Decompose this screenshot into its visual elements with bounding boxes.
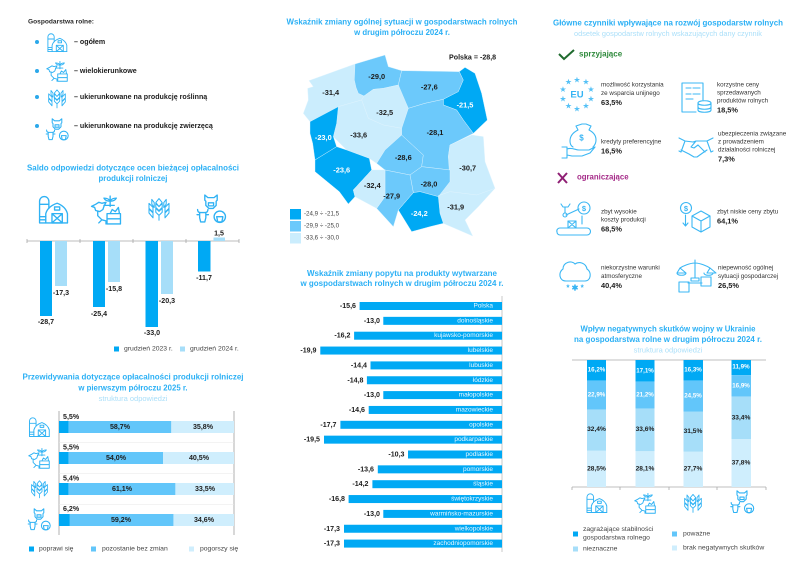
stacked columns: war impact: 27,7% [684, 466, 702, 472]
stacked bars: forecast: 33,5% [195, 485, 216, 493]
heading: map: w drugim półroczu 2024 r. [353, 28, 450, 37]
map values: -24,2 [411, 209, 428, 218]
bar chart: demand by voivodeship: małopolskie [459, 392, 493, 399]
map legend [290, 209, 340, 244]
bar chart: demand by voivodeship: -13,0 [364, 391, 380, 399]
stacked columns: war impact: 11,9% [732, 364, 750, 370]
bar chart: profitability balance: -28,7 [38, 318, 54, 326]
factor: insurance [679, 130, 787, 164]
stacked columns: war impact: 22,9% [588, 392, 606, 398]
bar chart: profitability balance: -11,7 [196, 274, 212, 282]
factor: uncertainty: niepewność ogólnej [718, 264, 773, 272]
bar chart: demand by voivodeship: -13,6 [358, 465, 374, 473]
bar chart: demand by voivodeship: -19,5 [304, 436, 320, 444]
bar chart: demand by voivodeship: -14,2 [352, 480, 369, 488]
stacked columns: war impact: 24,5% [684, 392, 702, 400]
map values: -30,7 [459, 164, 476, 172]
factor: EU support: ★ [565, 78, 572, 86]
bar chart: profitability balance: -20,3 [159, 297, 175, 305]
stacked columns: war impact: 28,1% [636, 466, 654, 472]
factor: uncertainty: 26,5% [718, 281, 739, 290]
stacked bars: forecast: 34,6% [194, 516, 215, 524]
map values: -31,9 [447, 202, 464, 212]
stacked columns: war impact [572, 360, 766, 513]
bar chart: demand by voivodeship: kujawsko-pomorskie [434, 332, 493, 339]
stacked columns: war impact: 33,6% [636, 426, 654, 433]
map values: -33,6 [350, 130, 367, 140]
bar chart: demand by voivodeship: Polska [473, 302, 493, 310]
map values: -31,4 [322, 88, 340, 97]
factor: preferential loans: 16,5% [601, 146, 622, 156]
bar chart: profitability balance: -33,0 [144, 329, 160, 337]
bar chart: profitability balance: grudzień 2023 r. [124, 346, 173, 352]
legend: war impact [573, 526, 764, 552]
factor: good sale prices: sprzedawanych [717, 90, 761, 96]
heading: profitability balance: Saldo odpowiedzi dotyczące ocen bieżącej opłacalności [27, 164, 239, 172]
factor: uncertainty: sytuacji gospodarczej [718, 273, 778, 280]
bar chart: demand by voivodeship: łódzkie [473, 377, 493, 384]
bar chart: demand by voivodeship: -13,0 [364, 317, 380, 325]
factor: insurance: ubezpieczenia związane [718, 130, 787, 138]
factor: EU support: ★ [573, 104, 581, 114]
heading: factors [553, 18, 783, 38]
factor: low sale prices [680, 202, 779, 232]
label: limiting: ograniczające [577, 172, 629, 182]
map values: -21,5 [457, 100, 473, 110]
bar chart: demand by voivodeship: -17,3 [324, 525, 340, 533]
legend: war impact: gospodarstwa rolnego [583, 534, 650, 542]
factor: EU support: ★ [587, 94, 595, 104]
factor: weather: atmosferyczne [601, 273, 642, 280]
bar chart: demand by voivodeship: warmińsko-mazurskie [429, 510, 493, 517]
bar chart: demand by voivodeship [300, 296, 502, 552]
factor: EU support: ★ [559, 85, 567, 94]
factor: EU support: ze wsparcia unijnego [601, 90, 660, 97]
factor: EU support: ★ [587, 85, 595, 94]
stacked bars: forecast: 35,8% [193, 423, 214, 431]
stacked bars: forecast [28, 411, 234, 535]
stacked columns: war impact: 28,5% [587, 466, 606, 472]
factor: weather: niekorzystne warunki [601, 264, 660, 272]
factor: preferential loans [562, 124, 662, 158]
bar chart: demand by voivodeship: podlaskie [466, 451, 493, 458]
factor: weather [560, 262, 660, 292]
stacked bars: forecast: 40,5% [189, 454, 210, 462]
heading: war impact: na gospodarstwa rolne w drugim półroczu 2024 r. [574, 335, 762, 344]
bar chart: demand by voivodeship: -10,3 [388, 450, 405, 458]
bar chart: demand by voivodeship: opolskie [469, 421, 493, 428]
factor: EU support: EU [570, 90, 584, 100]
factor: weather: 40,4% [601, 281, 622, 290]
factor: EU support: ★ [582, 78, 590, 86]
legend: farm types [28, 18, 213, 140]
heading: forecast: struktura odpowiedzi [99, 394, 168, 403]
bar chart: demand by voivodeship: -15,6 [340, 302, 356, 310]
factor: preferential loans: $ [579, 134, 584, 142]
map legend: -33,6 ÷ -30,0 [304, 234, 340, 242]
legend: forecast: pogorszy się [200, 546, 238, 552]
factor: low sale prices: 64,1% [717, 216, 738, 226]
legend: war impact: brak negatywnych skutków [683, 544, 764, 552]
legend: forecast: poprawi się [39, 546, 74, 552]
heading: war impact: Wpływ negatywnych skutków wojny w Ukrainie [580, 324, 756, 334]
factor: good sale prices [682, 82, 769, 114]
icon: check mark [559, 50, 574, 59]
bar chart: demand by voivodeship: -19,9 [300, 347, 317, 355]
factor: high production costs: koszty produkcji [601, 216, 646, 224]
icon: cross [558, 173, 567, 183]
map values: -23,0 [315, 133, 332, 142]
stacked columns: war impact: 16,2% [588, 366, 606, 374]
bar chart: demand by voivodeship: lubelskie [468, 347, 493, 354]
stacked columns: war impact: 21,2% [636, 392, 654, 398]
factor: EU support: ★ [573, 76, 581, 84]
factor: high production costs: zbyt wysokie [601, 208, 637, 216]
bar chart: demand by voivodeship: -17,7 [320, 421, 337, 429]
bar chart: demand by voivodeship: wielkopolskie [454, 525, 493, 532]
bar chart: demand by voivodeship: -14,4 [351, 361, 367, 369]
bar chart: demand by voivodeship: śląskie [473, 481, 493, 488]
bar chart: demand by voivodeship: dolnośląskie [457, 317, 493, 324]
stacked columns: war impact: 17,1% [636, 368, 654, 374]
factor: insurance: 7,3% [718, 154, 735, 164]
heading: map: Wskaźnik zmiany ogólnej sytuacji w gospodarstwach rolnych [286, 18, 518, 26]
factor: insurance: działalności rolniczej [718, 146, 775, 154]
heading: profitability balance [27, 164, 239, 183]
legend: war impact: nieznaczne [583, 546, 618, 552]
factor: high production costs: 68,5% [601, 224, 622, 234]
legend: forecast [29, 546, 238, 552]
bar chart: demand by voivodeship: -14,6 [349, 406, 365, 414]
bar chart: profitability balance: -15,8 [106, 285, 122, 293]
map of Poland [303, 55, 495, 236]
legend: farm types: – ukierunkowane na produkcję zwierzęcą [74, 122, 213, 130]
bar chart: profitability balance: -17,3 [53, 289, 69, 297]
bar chart: demand by voivodeship: -16,2 [334, 332, 351, 340]
legend: forecast: pozostanie bez zmian [102, 546, 168, 552]
factor: high production costs [557, 202, 646, 235]
legend: farm types: – wielokierunkowe [74, 67, 137, 75]
bar chart: demand by voivodeship: -16,8 [329, 495, 345, 503]
factor: low sale prices: $ [684, 204, 689, 213]
factor: EU support: ★ [582, 102, 590, 110]
bar chart: demand by voivodeship: zachodniopomorskie [433, 540, 493, 547]
stacked bars: forecast: 58,7% [110, 423, 131, 431]
heading: forecast: w pierwszym półroczu 2025 r. [77, 384, 188, 392]
legend: war impact: poważne [683, 530, 710, 538]
factor: high production costs: $ [582, 204, 587, 213]
stacked columns: war impact: 32,4% [587, 426, 606, 433]
factor: EU support [559, 76, 664, 114]
heading: war impact: struktura odpowiedzi [634, 346, 703, 354]
bar chart: profitability balance: -25,4 [91, 310, 107, 318]
map legend: -29,9 ÷ -25,0 [304, 222, 340, 230]
bar chart: demand by voivodeship: mazowieckie [456, 406, 493, 413]
heading: forecast [22, 372, 244, 403]
factor: weather: * ✱ * [566, 284, 585, 292]
factor: EU support: 63,5% [601, 98, 622, 107]
bar chart: profitability balance: 1,5 [214, 230, 224, 238]
factor: good sale prices: 18,5% [717, 106, 738, 114]
bar chart: demand by voivodeship: podkarpackie [454, 436, 493, 443]
legend: farm types: – ogółem [74, 38, 105, 46]
heading: map [286, 18, 518, 37]
factor: low sale prices: zbyt niskie ceny zbytu [717, 208, 779, 216]
bar chart: demand by voivodeship: -14,8 [347, 376, 364, 384]
label: favourable: sprzyjające [579, 50, 623, 58]
factor: uncertainty [677, 260, 778, 292]
heading: demand: w gospodarstwach rolnych w drugim półroczu 2024 r. [299, 279, 504, 288]
stacked bars: forecast: 59,2% [111, 516, 132, 524]
map values: -32,4 [364, 181, 382, 190]
heading: factors: odsetek gospodarstw rolnych wskazujących dany czynnik [574, 29, 762, 38]
factor: EU support: możliwość korzystania [601, 82, 664, 88]
stacked columns: war impact: 16,3% [684, 366, 702, 374]
stacked bars: forecast: 5,4% [63, 474, 80, 482]
stacked columns: war impact: 31,5% [684, 428, 702, 435]
bar chart: demand by voivodeship: lubuskie [469, 362, 493, 369]
map values: -28,6 [395, 153, 412, 162]
heading: war impact [574, 324, 762, 354]
map values: -28,1 [427, 128, 443, 137]
bar chart: demand by voivodeship: -13,0 [364, 510, 380, 518]
map values: -27,6 [421, 82, 438, 92]
stacked columns: war impact: 37,8% [732, 460, 750, 466]
stacked columns: war impact: 33,4% [732, 414, 750, 422]
bar chart: profitability balance: grudzień 2024 r. [190, 346, 239, 352]
heading: demand [299, 269, 504, 288]
map values [315, 72, 476, 218]
factor: EU support: ★ [559, 94, 567, 104]
bar chart: demand by voivodeship: pomorskie [463, 466, 493, 473]
bar chart: profitability balance [27, 195, 239, 352]
heading: forecast: Przewidywania dotyczące opłacalności produkcji rolniczej [22, 372, 244, 382]
map values: -29,0 [368, 72, 385, 81]
map values: -32,5 [376, 108, 393, 117]
factor: insurance: z prowadzeniem [718, 138, 764, 146]
map legend: -24,9 ÷ -21,5 [304, 210, 340, 218]
factor: good sale prices: produktów rolnych [717, 98, 769, 104]
legend: farm types: – ukierunkowane na produkcję roślinną [74, 93, 207, 101]
legend: farm types: Gospodarstwa rolne: [28, 18, 94, 26]
map values: -27,9 [383, 192, 400, 200]
factor: EU support: ★ [565, 102, 572, 110]
label: Poland value: Polska = -28,8 [449, 54, 496, 62]
stacked bars: forecast: 54,0% [106, 454, 127, 462]
factor: good sale prices: korzystne ceny [717, 82, 760, 88]
stacked bars: forecast: 5,5% [63, 413, 80, 421]
bar chart: demand by voivodeship: świętokrzyskie [451, 496, 493, 503]
heading: demand: Wskaźnik zmiany popytu na produkty wytwarzane [307, 269, 498, 278]
stacked bars: forecast: 61,1% [112, 485, 133, 493]
legend: war impact: zagrażające stabilności [583, 526, 654, 533]
factor: preferential loans: kredyty preferencyjne [601, 138, 662, 146]
map values: -23,6 [333, 166, 350, 174]
stacked bars: forecast: 6,2% [63, 505, 80, 513]
map values: -28,0 [421, 180, 437, 188]
bar chart: demand by voivodeship: -17,3 [324, 540, 340, 548]
heading: factors: Główne czynniki wpływające na rozwój gospodarstw rolnych [553, 18, 783, 28]
stacked bars: forecast: 5,5% [63, 444, 80, 452]
heading: profitability balance: produkcji rolniczej [99, 174, 167, 183]
stacked columns: war impact: 16,9% [732, 382, 750, 390]
